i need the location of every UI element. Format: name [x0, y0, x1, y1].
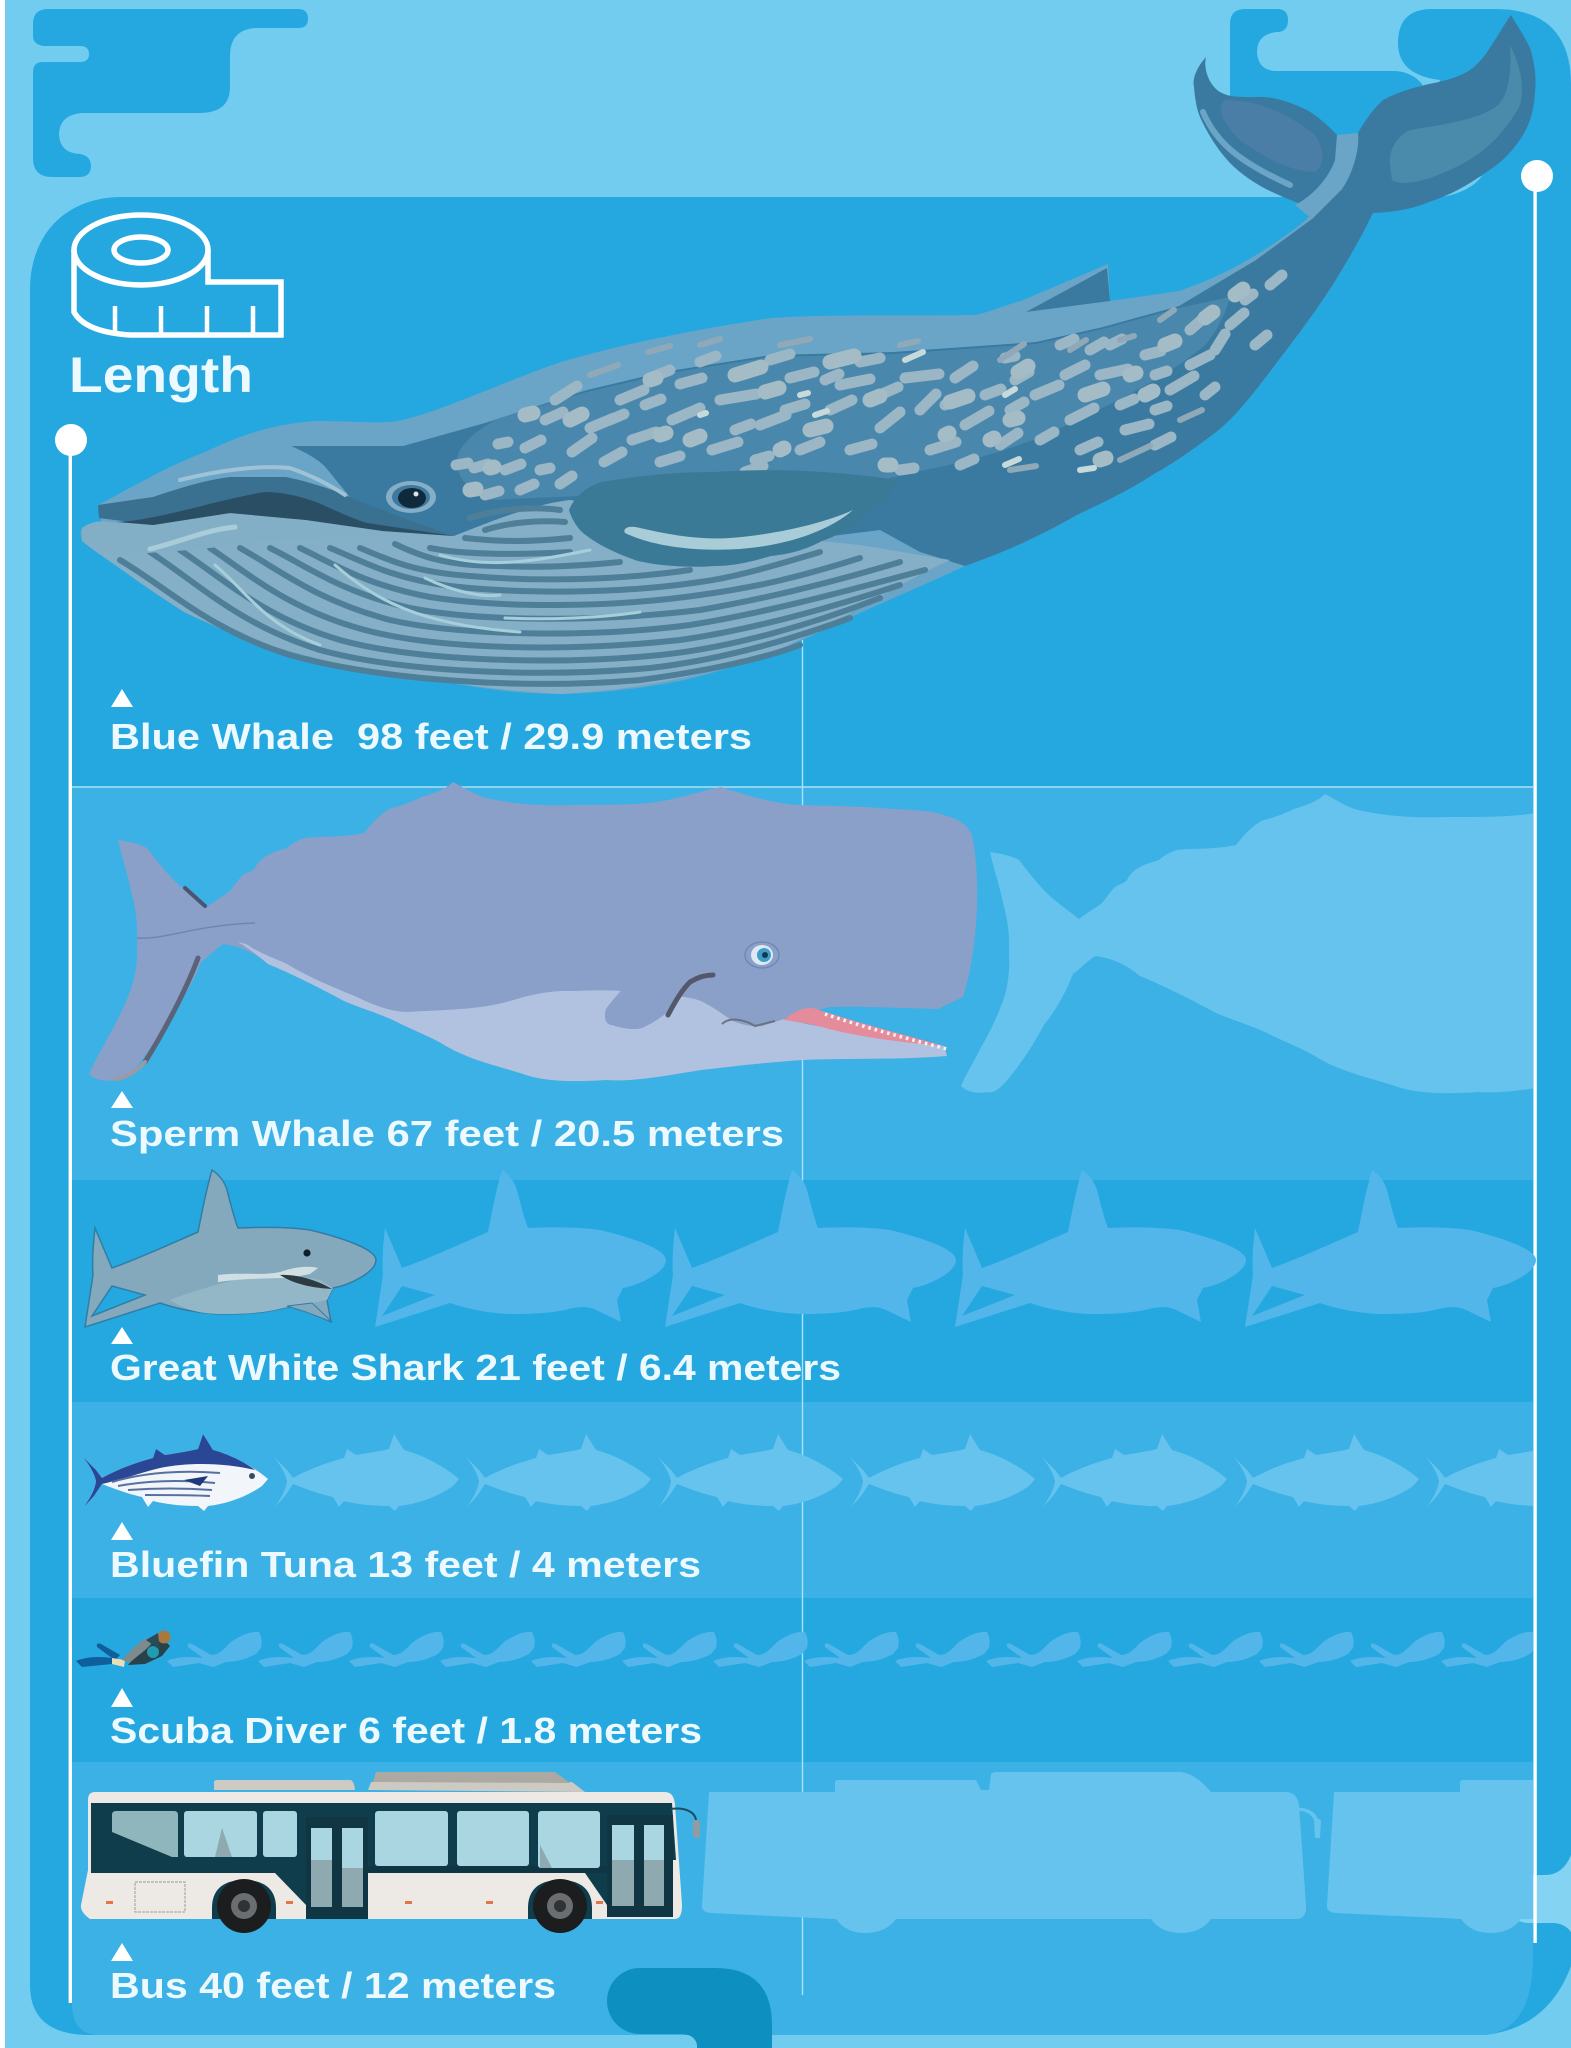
marker and label: blue whale: Blue Whale 98 feet / 29.9 meters	[110, 716, 752, 757]
illustration: great white shark	[85, 1170, 376, 1327]
tuna pectoral fin	[184, 1476, 208, 1486]
bus windows	[184, 1811, 664, 1907]
silhouette: sperm whale scale	[961, 794, 1571, 1093]
shark eye	[303, 1249, 311, 1257]
sperm whale mouth	[784, 1008, 944, 1046]
marker and label: blue whale	[110, 689, 752, 757]
sperm whale flipper	[605, 968, 700, 1029]
grid lines	[72, 640, 1533, 1995]
decorative blob: top right	[1230, 9, 1571, 197]
whale upper jaw	[98, 477, 454, 536]
bus body	[81, 1792, 682, 1919]
whale belly	[82, 500, 950, 694]
bus mirror	[671, 1809, 700, 1838]
sperm whale eye	[745, 942, 779, 968]
shark pectoral fin	[287, 1303, 332, 1322]
bus dark band	[91, 1803, 676, 1873]
decorative blob: right side notch	[1508, 1855, 1571, 1932]
sperm whale body	[89, 782, 977, 1081]
whale left fluke	[1194, 57, 1340, 207]
tuna eye	[249, 1473, 255, 1479]
whale dark back	[291, 153, 1373, 566]
tuna stripes	[112, 1472, 220, 1496]
whale body base	[80, 133, 1373, 694]
silhouettes: bus scale	[702, 1772, 1571, 1933]
decorative blob: top left	[33, 9, 308, 177]
marker and label: bus: Bus 40 feet / 12 meters	[110, 1965, 556, 2006]
illustration: sperm whale	[89, 782, 977, 1081]
shark belly	[170, 1277, 333, 1314]
marker and label: bluefin tuna	[110, 1522, 701, 1585]
whale right fluke	[1352, 15, 1536, 213]
whale mouth line	[117, 492, 454, 536]
illustration: scuba diver	[76, 1630, 170, 1667]
whale dorsal fin	[1026, 268, 1110, 312]
whale eye	[386, 481, 436, 513]
marker and label: scuba diver: Scuba Diver 6 feet / 1.8 meters	[110, 1710, 702, 1751]
heading: Length: Length	[69, 347, 253, 403]
marker and label: bus	[110, 1943, 556, 2006]
axis line: right with marker	[1521, 160, 1553, 1943]
bus roof units	[214, 1780, 355, 1790]
tuna back	[82, 1434, 255, 1507]
silhouettes: bluefin tuna scale	[273, 1434, 1571, 1511]
whale lower lip	[82, 509, 454, 556]
whale throat grooves	[120, 508, 925, 684]
sperm whale belly	[238, 942, 947, 1081]
row band: sperm whale	[72, 787, 1533, 1180]
row band: bluefin tuna	[72, 1402, 1533, 1598]
marker and label: great white shark	[110, 1327, 841, 1388]
bus vent	[135, 1882, 185, 1912]
whale pectoral fin	[569, 470, 898, 567]
whale speckles	[456, 275, 1282, 495]
whale tail strap	[1295, 133, 1358, 219]
marker and label: bluefin tuna: Bluefin Tuna 13 feet / 4 meters	[110, 1544, 701, 1585]
sperm whale tail shadows	[115, 888, 205, 1079]
marker and label: great white shark: Great White Shark 21 feet / 6.4 meters	[110, 1347, 841, 1388]
marker and label: sperm whale	[110, 1091, 784, 1154]
decorative blob: bottom	[607, 1968, 772, 2048]
whale mid-tone patch	[457, 297, 1230, 500]
axis line: left with marker	[55, 424, 87, 2003]
silhouettes: great white shark scale	[375, 1170, 1536, 1327]
bus markers	[106, 1901, 603, 1904]
silhouettes: scuba diver scale	[167, 1632, 1536, 1667]
illustration: blue whale	[80, 15, 1536, 694]
icon: measuring tape	[74, 215, 281, 335]
row band: bus	[72, 1762, 1533, 2035]
bus wheels	[212, 1879, 592, 1933]
light sliver under tail	[1440, 176, 1482, 197]
marker and label: sperm whale: Sperm Whale 67 feet / 20.5 meters	[110, 1113, 784, 1154]
shark mouth	[280, 1275, 332, 1289]
marker and label: scuba diver	[110, 1688, 702, 1751]
illustration: bus	[81, 1772, 700, 1933]
illustration: bluefin tuna	[82, 1434, 268, 1511]
